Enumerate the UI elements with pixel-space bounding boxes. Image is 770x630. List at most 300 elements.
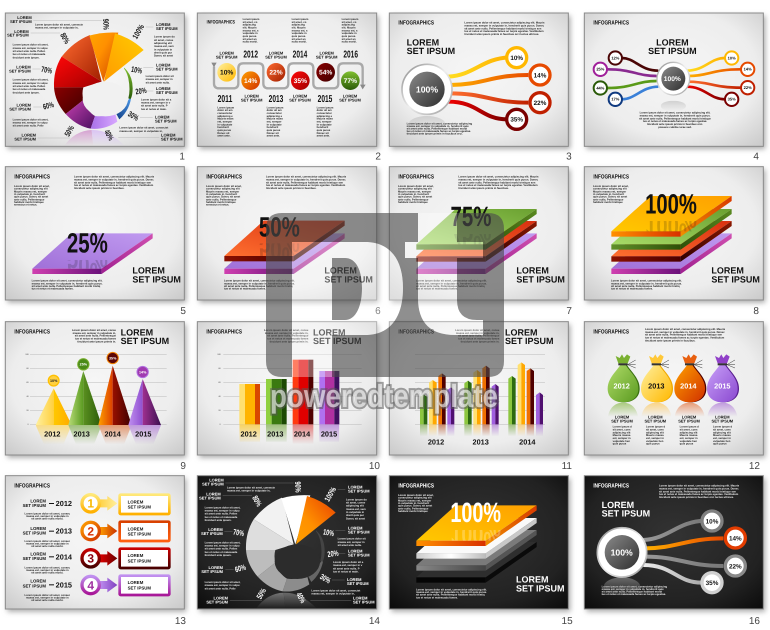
body text: massa est, semper in vulputate in, hendrerit quis purus. [640, 114, 710, 117]
body text blocks: Donec sit [317, 131, 329, 134]
percent nodes: 14% [744, 67, 752, 72]
callout labels: SET IPSUM [201, 531, 223, 536]
chart grid: 80 [26, 367, 29, 370]
bag 2014: 2014 [680, 382, 697, 390]
callout labels: LOREM [348, 485, 362, 490]
percent labels: 90% [101, 19, 111, 30]
body text blocks: habitant morbi tristique [14, 201, 44, 204]
percent labels: 80% [250, 494, 264, 508]
percent nodes: 25% [596, 67, 604, 72]
chart grid [217, 353, 362, 426]
bag captions: SET IPSUM [712, 419, 733, 423]
body text blocks: ante nulla. Pellentesque [593, 198, 624, 201]
callout labels [7, 15, 183, 142]
hub reflection [604, 578, 640, 594]
body text blocks: drerit quis pur [154, 51, 172, 54]
body text blocks: Lorem ipsum dolor sit amet, [206, 185, 242, 188]
callout labels: SET IPSUM [348, 530, 370, 534]
callout labels: SET IPSUM [348, 553, 370, 558]
body text blocks: sit amet ante nulla. Pellentesque habitant morbi tristiq [224, 285, 293, 288]
body text blocks: tincidunt ante ipsum primis in faucibus orci. [407, 132, 463, 135]
callout labels: SET IPSUM [7, 33, 29, 38]
body text blocks: tincidunt ante ipsum. [13, 91, 39, 94]
body text blocks: vulputate in [342, 32, 357, 35]
chart grid: 0 [28, 423, 29, 426]
body text blocks: consectetur [217, 112, 232, 115]
percent nodes [594, 51, 754, 106]
chart grid: 40 [218, 395, 221, 398]
body text blocks: est, semper in [713, 437, 731, 440]
body text blocks [613, 425, 732, 445]
body text blocks: tus et netus et malesuada fames ac turpis egestas. [407, 129, 471, 132]
heading: SET IPSUM [121, 336, 169, 346]
callout labels: LOREM [156, 86, 170, 91]
body text blocks: quis purus [646, 442, 660, 445]
body text blocks: quis purus [613, 442, 626, 445]
slide title: INFOGRAPHICS [593, 19, 629, 26]
100% hub: 100% [664, 75, 681, 83]
body text blocks: adipiscing e [217, 114, 233, 117]
percent labels: 10% [130, 65, 143, 76]
step 1: 1 [87, 497, 94, 510]
body text blocks: tus et netus et malesuada [205, 550, 237, 553]
body text blocks: quis purus. [292, 35, 306, 38]
body text blocks: Lorem ipsum dolor sit amet, [205, 581, 240, 584]
callout labels: SET IPSUM [202, 482, 224, 487]
bag 2012 [608, 354, 640, 417]
heading [132, 266, 181, 284]
body text blocks [13, 23, 175, 132]
heading: SET IPSUM [132, 274, 181, 284]
body text blocks: tus et netus et malesuada fames. [416, 287, 458, 290]
body text blocks: est, semper in [646, 437, 664, 440]
body text blocks: in vulputate [267, 123, 282, 126]
bars [420, 362, 543, 424]
body text blocks: tus et netus et malesuada fames. [416, 596, 458, 599]
25 percent figure: 25% [67, 227, 108, 259]
100% hub: 100% [416, 84, 438, 94]
body text: tincidunt ante ipsum primis in. [270, 340, 308, 343]
slide title: INFOGRAPHICS [398, 19, 434, 26]
body text blocks: quis purus [713, 442, 727, 445]
callout labels: LOREM [14, 29, 29, 34]
body text: sit amet ante nulla. Pellentesque habitant morbi tristique [639, 117, 711, 120]
pyramid badges [48, 352, 148, 386]
body text blocks: massa est, semper in vulputate in, hendrerit quis purus. Donec [74, 178, 154, 181]
body text: tus et netus et malesuada fames ac turpis egestas. Vestibulum [645, 336, 724, 339]
slide title: INFOGRAPHICS [14, 482, 50, 489]
body text blocks: Lorem ipsum dolor sit amet, consectetur adipiscing [602, 585, 667, 588]
body text blocks: massa est, semper in vulpu [13, 46, 48, 49]
chart grid: 80 [218, 367, 221, 370]
year labels [241, 430, 337, 438]
body text: Lorem ipsum dolor sit amet, conse [72, 329, 116, 332]
slide numbers: 10 [369, 460, 380, 471]
heading: LOREM [505, 327, 537, 337]
chart grid: 20 [26, 409, 29, 412]
heading [711, 266, 760, 284]
callout labels: LOREM [155, 115, 169, 119]
body text blocks: sit amet ante nulla. Pellentesque habitant morbi tristiq [416, 285, 485, 288]
body text blocks: sit amet ante nulla. Pellentesque habitant morbi tristique sen [74, 181, 151, 184]
body text blocks: sit amet an [243, 37, 257, 40]
bag 2015 [707, 354, 739, 417]
year labels: LOREM [319, 51, 334, 55]
body text blocks: sit amet, co [243, 20, 257, 23]
year labels: 2016 [343, 49, 358, 60]
body text blocks: quis purus. [342, 35, 356, 38]
body text blocks: in vulputate [317, 123, 332, 126]
heading: LOREM [407, 37, 439, 47]
body text blocks: sit amet, conse [154, 38, 173, 41]
body text blocks: consectetur adipiscing elit [206, 187, 240, 190]
body text: tus et netus et malesuada fames ac turpis egestas. [643, 120, 707, 123]
timeline year nodes: 77% [344, 77, 357, 85]
bag captions: LOREM [648, 415, 663, 420]
pyramids [36, 366, 161, 425]
panel: slide 13 numbered steps [5, 476, 186, 612]
slide title: INFOGRAPHICS [593, 173, 629, 180]
body text blocks: quis purus. Donec sit amet [14, 195, 48, 198]
body text blocks: tincidunt ante ipsum primis in faucibus. [74, 187, 124, 190]
callout labels: SET IPSUM [155, 119, 177, 123]
body text blocks: quis purus [267, 129, 280, 132]
body text blocks: massa est, semper in vulputate in, hendrerit quis purus. Donec [458, 178, 538, 181]
body text blocks: massa est, semper in [146, 78, 173, 81]
slide numbers: 2 [375, 151, 381, 162]
body text: tincidunt ante ipsum primis in. [461, 340, 499, 343]
panel: slide 15 dark layers [389, 476, 570, 612]
body text blocks: Lorem ipsum dolor sit amet, [14, 185, 50, 188]
panel: slide 7 75 percent layers [389, 167, 570, 303]
body text blocks: est, semper [267, 120, 281, 123]
heading: LOREM [132, 266, 165, 276]
percent reflection: 100% [450, 519, 501, 550]
body text blocks: sit amet ante nulla. Pelle [205, 587, 236, 590]
body text blocks: sit amet ante nulla. Pellentesque habitant morbi [407, 127, 467, 130]
body text blocks: massa est, s [342, 29, 358, 32]
step 1: SET IPSUM [23, 503, 46, 508]
body text blocks: Lorem ipsum dolor sit amet, consectetur adipiscing elit. [416, 279, 487, 282]
slide numbers: 9 [180, 460, 186, 471]
callout labels: LOREM [22, 133, 36, 138]
body text blocks: Lorem ipsum dolor sit amet, [13, 118, 48, 121]
body text blocks: in vulputate in, hendrerit [398, 193, 429, 196]
year labels: 2012 [243, 49, 258, 60]
body text blocks: dolor sit am [217, 109, 232, 112]
spiral pie [54, 32, 144, 129]
panel: slide 4 two-sided flow [584, 13, 765, 149]
body text blocks: massa est, semper in vulputate in, hendrerit quis purus. Donec [659, 487, 739, 490]
body text blocks [217, 18, 358, 137]
callout labels: LOREM [353, 596, 367, 600]
percent labels: 90% [293, 481, 303, 493]
pyramid badges: 25% [80, 363, 87, 367]
body text blocks: sit amet ante nulla. P [333, 567, 360, 570]
body text blocks: Lorem ipsum dolor sit amet, [205, 541, 240, 544]
orange layer [416, 505, 537, 546]
body text blocks: quis purus. Donec sit amet [398, 504, 432, 507]
body text blocks: massa est, semper in vulpu [205, 584, 240, 587]
slide title: INFOGRAPHICS [207, 19, 235, 25]
body text blocks: Lorem ipsum d [646, 425, 665, 428]
body text blocks: massa est, s [243, 29, 259, 32]
100% hub [657, 62, 690, 95]
body text blocks: quis purus [317, 129, 330, 132]
body text: sit amet ante nulla. Pellentesque [458, 334, 500, 337]
percent nodes: 14% [729, 535, 742, 542]
red layer [224, 221, 345, 261]
white layer [416, 518, 537, 559]
body text blocks: massa est, s [292, 29, 308, 32]
heading: LOREM [324, 266, 357, 276]
step 4: 4 [87, 578, 94, 592]
body text blocks: sit amet an [342, 37, 356, 40]
body text: tincidunt ante ipsum primis in faucibus. [645, 339, 695, 342]
purple layer [611, 233, 732, 274]
callout labels: SET IPSUM [206, 600, 228, 604]
flow tubes [643, 521, 723, 583]
percent reflection: 50% [259, 234, 300, 265]
percent nodes: 35% [706, 580, 718, 587]
callout labels: SET IPSUM [199, 496, 221, 500]
body text blocks: massa est, semper in vulputate in, hendrerit quis purus. Donec [266, 178, 346, 181]
chart grid [415, 354, 545, 424]
percent labels: 100% [323, 486, 338, 503]
year labels: SET IPSUM [316, 55, 337, 59]
callout labels: SET IPSUM [14, 137, 36, 142]
body text: Lorem ipsum dolor sit amet, consectetur adipiscing elit. [640, 111, 710, 114]
callout labels: LOREM [214, 596, 228, 600]
bag captions: SET IPSUM [611, 419, 633, 423]
body text blocks: vulputate hen [613, 439, 630, 442]
body text blocks: sit amet, conse [346, 501, 365, 504]
body text blocks: dolor sit am [317, 109, 332, 112]
callout labels: SET IPSUM [9, 107, 31, 111]
body text blocks: elit. Mauris [292, 26, 306, 29]
slide numbers: 13 [175, 615, 186, 626]
body text: massa est, semper in vulputate in, hendrerit quis purus. Donec [645, 330, 725, 333]
body text blocks: sit amet ante nulla. Pellentesque habitant morbi tristique sen [464, 27, 541, 30]
body text blocks: Mauris massa est, semper [398, 499, 431, 502]
100 percent figure: 100% [645, 188, 697, 219]
body text blocks: sit amet ante nulla. Pellen [13, 50, 45, 53]
body text blocks: sit amet ante nulla. Pellen [13, 85, 45, 88]
body text blocks: Lorem ipsum [292, 18, 308, 21]
body text: tus et netus et malesuada fames [458, 337, 500, 340]
body text blocks: sit amet ante nulla. Pellen [205, 547, 237, 550]
year labels: 2011 [218, 93, 232, 104]
75 percent figure: 75% [450, 201, 491, 232]
year labels [216, 49, 361, 104]
bag captions: LOREM [615, 415, 629, 420]
body text blocks: consectetur [317, 112, 332, 115]
flow tubes [448, 57, 528, 119]
body text blocks: consectetur adipiscing elit [398, 187, 432, 190]
callout labels: LOREM [208, 527, 223, 532]
heading: LOREM [656, 37, 689, 47]
body text blocks: Lorem ipsum [267, 106, 283, 109]
body text blocks: massa est, semper in vulputate in, hendrerit quis purus. [224, 282, 295, 285]
50 percent figure: 50% [259, 211, 300, 243]
body text blocks [205, 486, 367, 595]
body text blocks: sit amet ante nulla. Pellentesque habitant morbi tristiq [611, 285, 680, 288]
body text blocks: Lorem ipsum dolor sit amet, consectetur adipiscing elit. [32, 279, 102, 282]
body text blocks: massa est, semper in vulputate in, [119, 129, 163, 132]
body text blocks: Lorem ipsum dolor sit amet, consectet [119, 126, 168, 129]
body text blocks: vulputate hen [713, 439, 730, 442]
body text blocks: quis purus. [243, 35, 257, 38]
body text blocks: in vulputate [217, 123, 232, 126]
panel: slide 9 pyramid chart [5, 322, 186, 458]
panel: slide 10 bar chart [197, 322, 379, 458]
body text blocks: quis purus [680, 442, 693, 445]
body text blocks: hendrerit [217, 126, 229, 129]
year labels: LOREM [244, 94, 259, 99]
body text blocks: nulla morbi. [292, 40, 307, 43]
body text blocks: adipiscing e [317, 114, 332, 117]
step 1: LOREM [30, 498, 46, 503]
heading [648, 37, 697, 56]
body text blocks: massa est, semper in vulpu [205, 544, 240, 547]
body text blocks: Lorem ipsum [342, 18, 358, 21]
body text blocks: Lorem ipsum d [613, 425, 632, 428]
step 4: massa est, semper in vulputate in [26, 596, 69, 599]
body text blocks: Lorem ipsum dolor sit a [141, 98, 171, 101]
body text blocks: sit amet ante nulla. Pellentesque habitant morbi tristiq [32, 285, 100, 288]
year labels: 2012 [428, 438, 444, 446]
step 3: Lorem ipsum dolor sit amet, consec [25, 566, 70, 569]
panel: slide 2 timeline [197, 13, 379, 149]
bag 2015: 2015 [714, 382, 730, 390]
body text blocks: tus et netus et malesuada [13, 88, 45, 91]
panel: slide 12 money bags [584, 322, 765, 458]
slide title: INFOGRAPHICS [14, 328, 50, 335]
body text blocks: Lorem ipsum dolor sit amet, [13, 43, 48, 46]
body text blocks: massa est, semper in vulputate in, hendrerit quis [407, 124, 469, 127]
body text blocks: in vulputate in, hendrerit [14, 193, 45, 196]
body text blocks: sit amet, co [292, 20, 306, 23]
body text blocks: massa est, semper in v [333, 564, 362, 567]
step 3: sit amet ante nulla morbi. [31, 571, 63, 574]
heading [505, 327, 554, 346]
percent nodes [507, 48, 550, 129]
body text blocks: consectetur adipiscing elit [593, 187, 627, 190]
bars [239, 360, 339, 424]
green layer [416, 209, 537, 250]
heading: LOREM [121, 327, 153, 337]
body text blocks: Lorem ipsum dolor sit amet, consectetur adipiscing elit. [416, 588, 487, 591]
step 3: LOREM [30, 551, 46, 556]
year labels: SET IPSUM [289, 98, 311, 103]
percent nodes: 35% [510, 116, 523, 123]
body text blocks: Lorem ipsum dolor sit a [333, 561, 363, 564]
body text blocks: Lorem ipsum dolor sit amet, consectetur adipiscing [407, 122, 472, 125]
bag 2013 [641, 354, 673, 417]
timeline year nodes: 54% [319, 69, 332, 76]
body text blocks: Lorem ipsum dolor sit amet, consectetur adipiscing elit. Mauris [458, 175, 538, 178]
body text blocks: quis purus [217, 129, 231, 132]
pyramid reflections [36, 425, 161, 444]
body text blocks: Lorem ipsum dolor sit amet, [398, 494, 434, 497]
body text blocks: tus et netus et malesuada fames ac turpis egestas. Vestibulum [458, 184, 538, 187]
body text blocks: massa est, semper in vulputate in, hendrerit quis purus. [416, 282, 487, 285]
slide title: INFOGRAPHICS [398, 328, 434, 335]
slide title: INFOGRAPHICS [593, 328, 629, 335]
timeline track [211, 63, 366, 89]
step 2: SET IPSUM [128, 532, 151, 537]
body text blocks: massa est, semper in v [141, 101, 170, 104]
pyramid badges: 35% [109, 356, 116, 360]
year labels: SET IPSUM [265, 55, 287, 59]
body text blocks: Lorem ipsum dolor sit amet, [593, 185, 629, 188]
percent nodes: 14% [534, 72, 546, 79]
body text blocks [593, 185, 682, 290]
body text: posuere cubilia curae sed. [658, 125, 692, 128]
body text blocks: in vulputate in, hendrerit [593, 193, 624, 196]
body text blocks: Lorem ipsum dolor sit amet, consectetur adipiscing elit. Mauris [659, 484, 739, 487]
timeline year nodes [217, 63, 360, 90]
chart grid: 100 [217, 353, 221, 356]
body text blocks: tus et netus et malesuada fames. [611, 287, 653, 290]
body text blocks: Lorem ipsum dolor sit amet, consecte [227, 486, 275, 489]
bag captions: LOREM [682, 415, 696, 420]
body text blocks: Lorem ipsum do [154, 35, 175, 38]
callout labels: LOREM [156, 22, 170, 27]
bag 2014 [674, 354, 706, 417]
step 1: Lorem ipsum dolor sit amet, consec [25, 512, 70, 515]
body text blocks: amet ante. [267, 134, 280, 137]
callout labels: SET IPSUM [156, 90, 178, 95]
body text blocks: Mauris massa est, semper [398, 190, 431, 193]
callout labels: SET IPSUM [10, 19, 32, 24]
body text blocks: sit amet, cons [646, 428, 664, 431]
year labels: 2013 [473, 438, 489, 446]
body text blocks [407, 21, 545, 135]
body text: Lorem ipsum dolor sit amet, conse [264, 329, 308, 332]
percent reflection: 75% [450, 223, 491, 254]
year labels [428, 438, 536, 446]
body text blocks: Lorem ipsum dolor sit amet, consectetur adipiscing elit. [224, 279, 295, 282]
callout labels: SET IPSUM [348, 489, 370, 494]
body text blocks: elit. Mauris [243, 26, 257, 29]
percent labels: 80% [58, 31, 72, 45]
100% hub: 100% [611, 547, 633, 557]
percent labels: 20% [327, 549, 339, 559]
body text blocks: Mauris mass [217, 117, 234, 120]
percent nodes: 10% [510, 55, 523, 62]
body text blocks: ante nulla. Pellentesque [398, 507, 429, 510]
body text blocks: in vulputate in [346, 511, 364, 514]
body text blocks: sit amet, cons [613, 428, 631, 431]
body text blocks: Lorem ipsum dolor sit amet, consecte [35, 23, 83, 26]
percent reflection: 50% [67, 249, 108, 281]
body text blocks: adipiscing e [267, 114, 282, 117]
body text blocks: habitant morbi tristique [593, 201, 623, 204]
body text blocks [398, 494, 487, 599]
watermark: pt logo and wordmark [266, 213, 504, 414]
body text: tus et netus et malesuada fames [267, 337, 309, 340]
body text blocks: Lorem ipsum dolor sit amet, consectet [311, 589, 360, 592]
body text blocks: in vulputate in [154, 48, 172, 51]
year labels: LOREM [269, 51, 283, 55]
body text blocks: elit. Mauris [342, 26, 356, 29]
body text blocks: Lorem ipsum dolor sit amet, consectetur adipiscing elit. Mauris [74, 175, 154, 178]
body text blocks: Lorem ipsum dolor sit amet, consectetur adipiscing elit. Mauris [464, 21, 544, 24]
body text blocks [602, 484, 739, 596]
step 4 [23, 576, 169, 602]
callout labels: LOREM [209, 565, 223, 570]
